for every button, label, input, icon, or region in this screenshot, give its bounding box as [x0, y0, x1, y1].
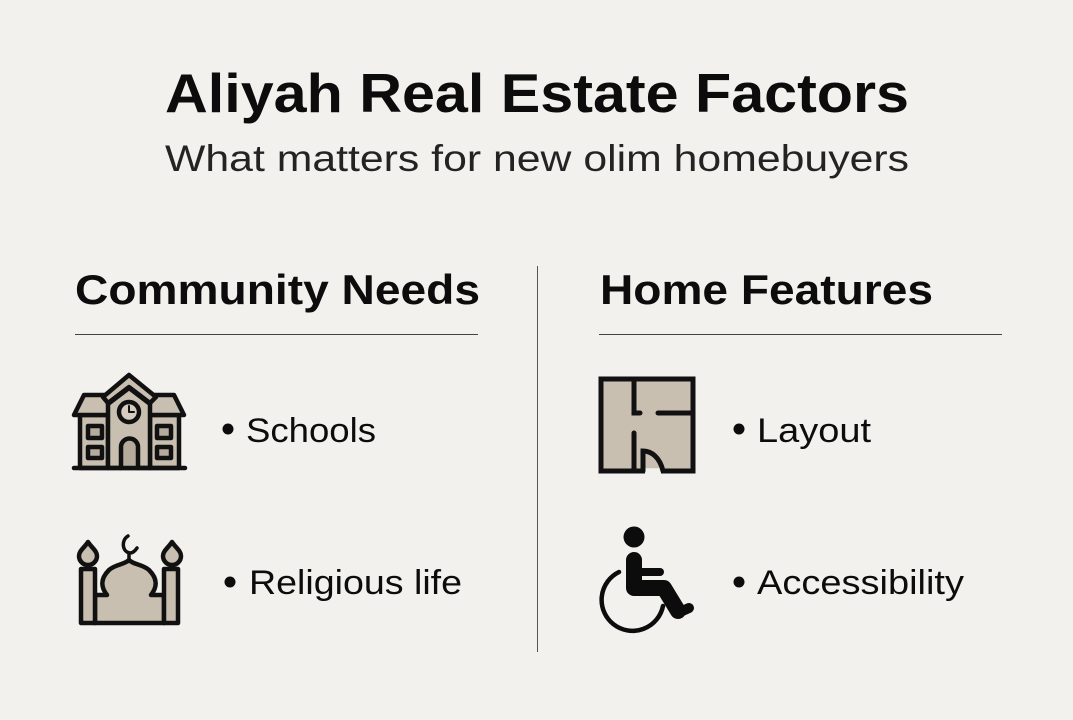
heading: home features: Home Features: [600, 266, 933, 313]
bullet: accessibility: [734, 576, 744, 588]
panel: community needs: [74, 266, 480, 623]
bullet: layout: [734, 424, 744, 434]
label: layout: Layout: [757, 412, 872, 450]
heading: community needs: Community Needs: [75, 266, 480, 313]
icon: wheelchair: [602, 526, 689, 631]
subtitle: What matters for new olim homebuyers: [165, 138, 909, 179]
icon: mosque: [79, 536, 181, 623]
label: schools: Schools: [246, 412, 376, 450]
center divider: [537, 266, 538, 652]
icon: school building: [74, 375, 185, 468]
panel: home features: [599, 266, 1002, 631]
title: Aliyah Real Estate Factors: [165, 62, 909, 124]
label: accessibility: Accessibility: [757, 564, 964, 602]
bullet: schools: [222, 424, 234, 434]
bullet: religious life: [224, 576, 236, 588]
label: religious life: Religious life: [249, 564, 462, 602]
icon: floor plan: [601, 379, 693, 471]
